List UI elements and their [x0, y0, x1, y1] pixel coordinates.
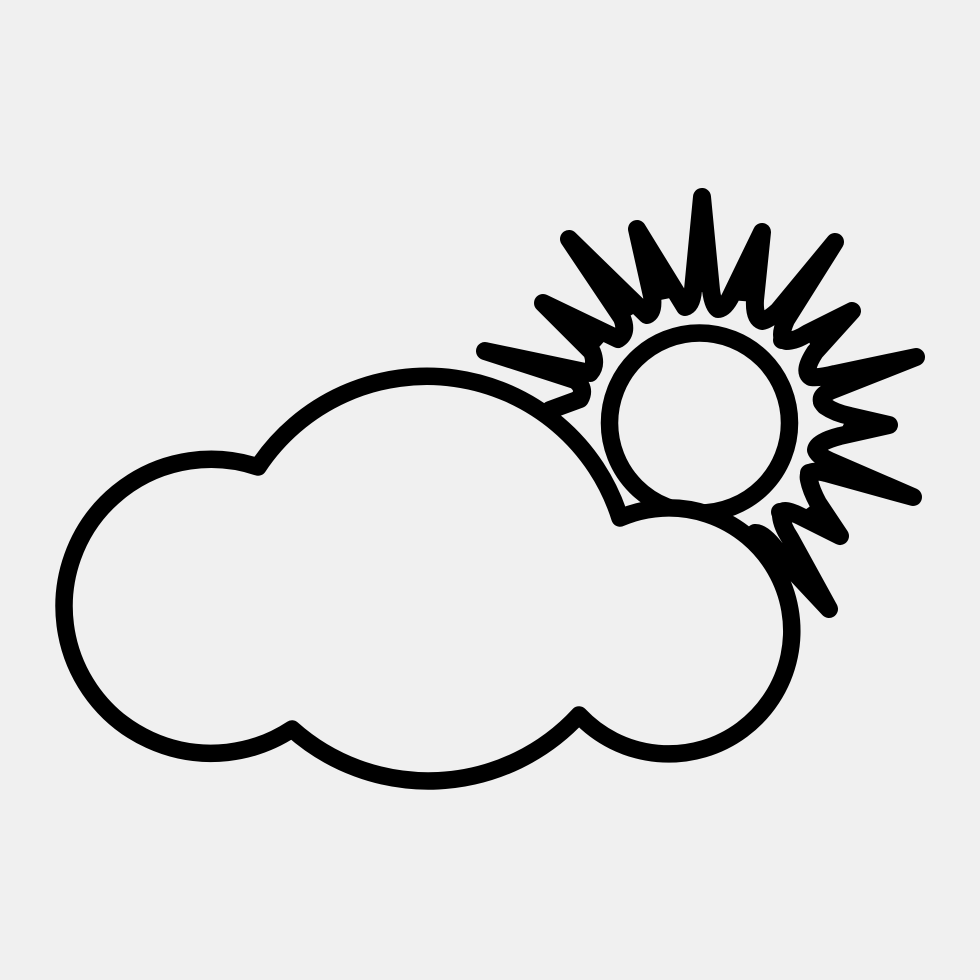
icon: sun [485, 197, 916, 609]
rounded ray valleys [580, 306, 822, 512]
icon: cloud [64, 376, 792, 781]
sun disc [610, 333, 790, 513]
sun rays outline [485, 197, 916, 609]
solid ray cores [485, 197, 916, 609]
